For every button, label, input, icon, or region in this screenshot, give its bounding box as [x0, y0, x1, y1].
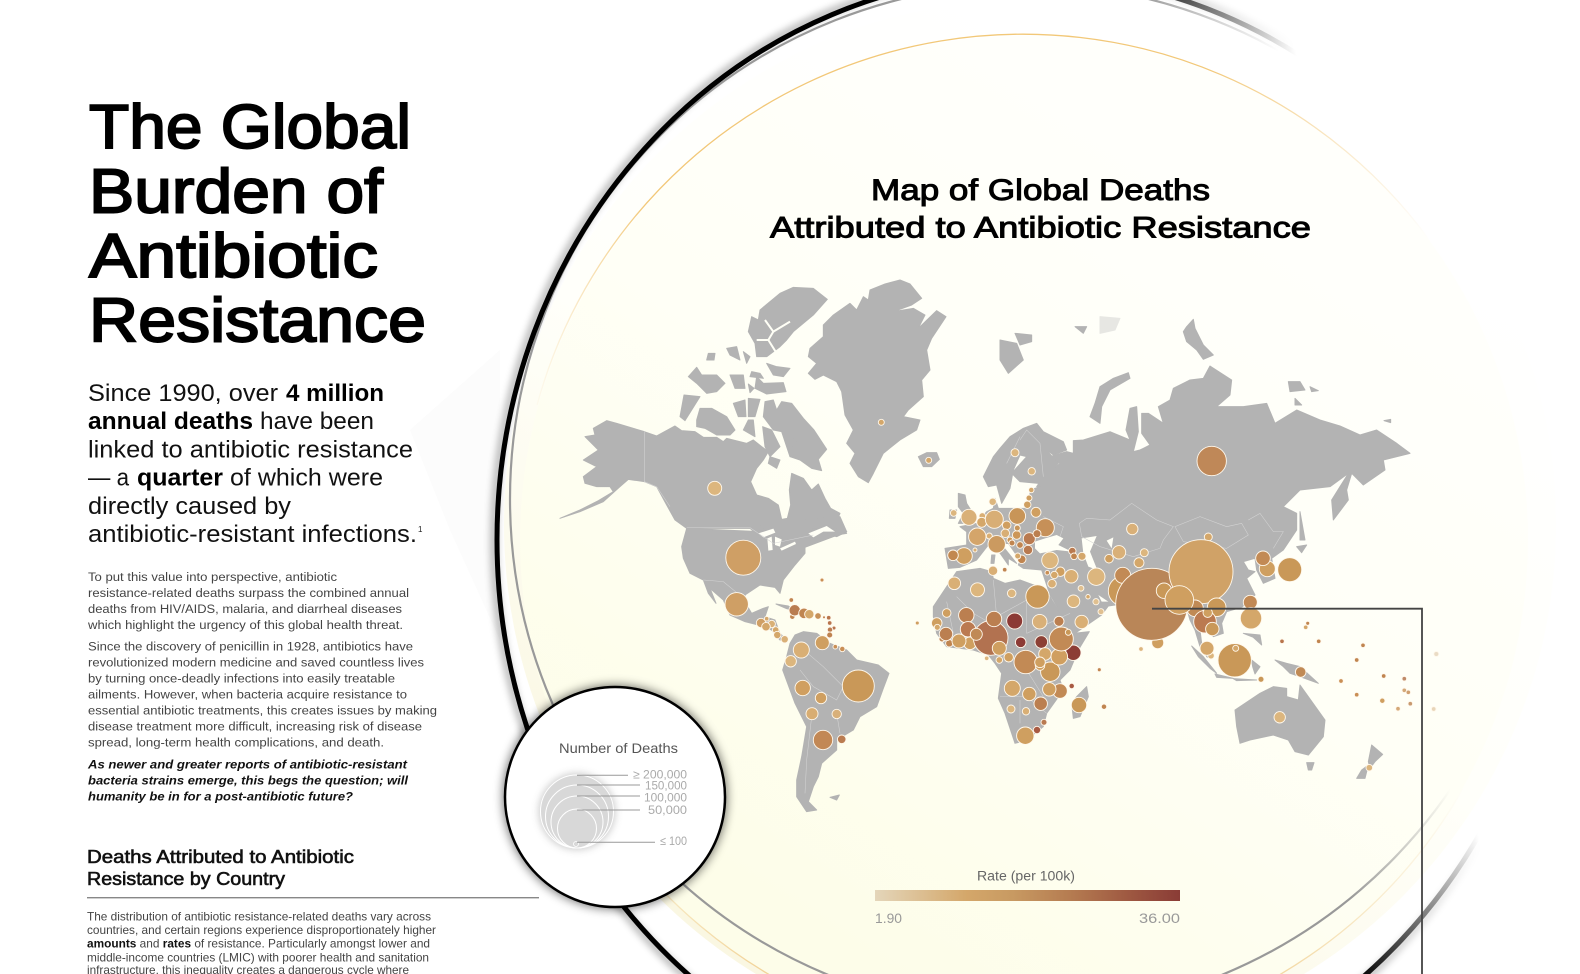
section heading: Resistance by Country: [87, 869, 285, 889]
bubbles: oceania and pacific: [1258, 621, 1439, 771]
rate colour legend: 36.00: [1139, 910, 1180, 926]
map title: Attributed to Antibiotic Resistance: [770, 212, 1311, 244]
section paragraph: countries, and certain regions experience disproportionately higher: [87, 923, 436, 937]
body paragraph: penicillin: by turning once-deadly infections into easily treatable: [88, 672, 395, 686]
legend labels: 100,000: [644, 790, 687, 804]
legend: number of deaths: Number of Deaths: [559, 740, 678, 756]
italic question: As newer and greater reports of antibiotic-resistant: [87, 757, 408, 771]
legend labels: ≤ 100: [660, 834, 687, 848]
bubbles: africa: [931, 566, 1107, 744]
lead statement: 1: [418, 525, 423, 534]
title: Resistance: [89, 286, 426, 356]
lead statement: Since 1990, over: [88, 380, 278, 407]
body paragraph: perspective: which highlight the urgency of this global health threat.: [87, 618, 403, 632]
lead statement: antibiotic-resistant infections.: [88, 521, 417, 548]
title: [89, 93, 426, 356]
map: eurasia: [945, 317, 1410, 657]
map: greenland and iceland: [808, 280, 946, 483]
legend labels: [633, 768, 687, 848]
rate colour legend: 1.90: [875, 910, 902, 926]
map title: Map of Global Deaths: [871, 174, 1210, 207]
section paragraph: The distribution of antibiotic resistance-related deaths vary across: [87, 910, 431, 924]
rate colour legend: [875, 869, 1180, 926]
map title: [770, 174, 1311, 244]
map: arctic channels: [757, 320, 919, 447]
italic question: [87, 757, 409, 803]
lead statement: 4 million: [286, 380, 384, 407]
italic question: bacteria strains emerge, this begs the question; will: [88, 773, 409, 787]
lead statement: quarter: [137, 465, 223, 492]
map: british isles and italy: [949, 493, 1017, 565]
legend circles: [539, 774, 615, 850]
map: north america north: [560, 287, 847, 552]
rate colour legend: Rate (per 100k): [977, 869, 1075, 884]
legend labels: ≥ 200,000: [633, 768, 687, 782]
italic question: humanity be in for a post-antibiotic future?: [88, 789, 353, 803]
section heading: Deaths Attributed to Antibiotic: [87, 847, 354, 867]
body paragraph: penicillin: revolutionized modern medicine and saved countless lives: [88, 656, 424, 670]
large ring disk with rings: [494, 0, 1560, 974]
bubbles: central america and caribbean: [756, 598, 836, 643]
body paragraph: penicillin: [88, 640, 437, 750]
lead statement: [88, 380, 423, 548]
bubbles: south america: [785, 621, 919, 750]
bubbles: north america and greenland: [708, 419, 932, 616]
lead statement: annual deaths: [88, 408, 253, 435]
section paragraph: amounts and rates of resistance. Particularly amongst lower and: [87, 937, 430, 951]
lead statement: directly caused by: [88, 493, 292, 520]
body paragraph: perspective: resistance-related deaths surpass the combined annual: [88, 586, 409, 600]
body paragraph: penicillin: essential antibiotic treatments, this creates issues by making: [88, 704, 437, 718]
section heading: [87, 847, 354, 889]
body paragraph: penicillin: ailments. However, when bacteria acquire resistance to: [88, 688, 407, 702]
map: americas and africa: [682, 528, 1089, 812]
map: inland seas: [1035, 535, 1113, 602]
legend: number of deaths: [503, 685, 727, 909]
body paragraph: perspective: [87, 570, 409, 632]
legend labels: 150,000: [645, 778, 687, 792]
body paragraph: perspective: To put this value into perspective, antibiotic: [88, 570, 337, 584]
legend labels: 50,000: [648, 803, 687, 817]
body paragraph: perspective: deaths from HIV/AIDS, malaria, and diarrheal diseases: [88, 602, 402, 616]
title: The Global: [89, 93, 411, 162]
lead statement: of which were: [230, 465, 383, 492]
bubbles: middle east: [1042, 547, 1105, 629]
body paragraph: penicillin: spread, long-term health complications, and death.: [88, 736, 384, 750]
world map: [560, 280, 1410, 812]
lead statement: — a: [88, 465, 129, 492]
bubbles: europe: [948, 449, 1054, 564]
map: asia pacific islands and australia: [1192, 633, 1383, 778]
background faint facet: [410, 350, 500, 640]
title: Antibiotic: [89, 222, 378, 291]
lead statement: have been: [260, 408, 374, 435]
section paragraph: [87, 910, 436, 974]
bubbles: asia: [1105, 446, 1302, 677]
body paragraph: penicillin: Since the discovery of penicillin in 1928, antibiotics have: [88, 640, 413, 654]
section paragraph: middle-income countries (LMIC) with poorer health and sanitation: [87, 950, 429, 964]
body paragraph: penicillin: disease treatment more difficult, increasing risk of disease: [88, 720, 422, 734]
title: Burden of: [89, 158, 384, 226]
map: country borders: [644, 430, 1283, 793]
lead statement: linked to antibiotic resistance: [88, 436, 413, 463]
callout leader line: [1152, 609, 1422, 974]
map: great lakes and gulf of st lawrence: [758, 526, 835, 551]
